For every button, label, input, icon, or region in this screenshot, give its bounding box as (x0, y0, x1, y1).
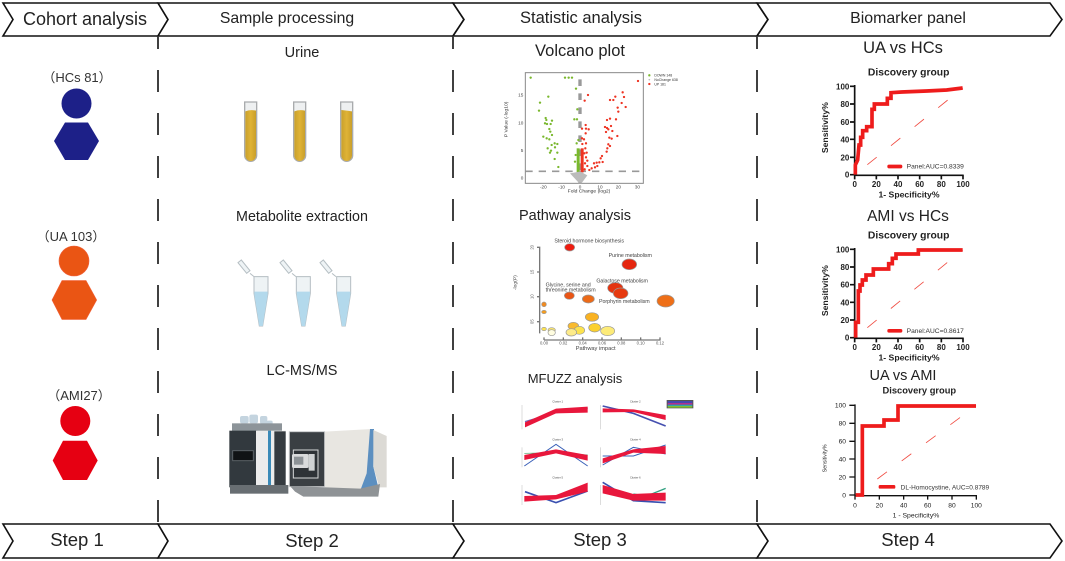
cohort: UA 103: （UA 103） (37, 229, 105, 244)
mfuzz: cluster titles: Cluster 4 (630, 438, 641, 442)
icon: microcentrifuge tubes (238, 260, 351, 326)
chart: ROC UA vs HCs: 20 (872, 180, 881, 189)
chart: ROC AMI vs HCs: 0 (845, 334, 850, 343)
heading: UA vs HCs: UA vs HCs (863, 39, 943, 57)
mfuzz: cluster titles: Cluster 1 (552, 400, 563, 404)
step header: Statistic analysis: Statistic analysis (520, 9, 642, 27)
volcano: legend: NoChange 638 (654, 78, 678, 82)
icon: urine tubes (245, 102, 353, 161)
chart: ROC UA vs HCs: Discovery group (868, 67, 949, 78)
volcano: x axis labels (540, 185, 640, 190)
heading: LC-MS/MS: LC-MS/MS (267, 363, 337, 379)
volcano: not significant points (570, 172, 587, 183)
chart: ROC AMI vs HCs: Panel:AUC=0.8617 (907, 328, 964, 335)
mfuzz: cluster titles: Cluster 3 (552, 438, 563, 442)
chart: ROC AMI vs HCs: 60 (915, 343, 925, 352)
step header: Statistic analysis (453, 3, 768, 36)
volcano: x axis labels: 30 (635, 185, 640, 190)
chart: ROC AMI vs HCs: 100 (956, 343, 970, 352)
chart: ROC UA vs HCs: 100 (836, 82, 850, 91)
mfuzz: legend (667, 400, 693, 408)
chart: ROC UA vs HCs: 60 (915, 180, 925, 189)
step footer: Step 2: Step 2 (285, 530, 339, 551)
step footer: Step 1: Step 1 (50, 529, 104, 550)
chart: ROC UA vs AMI: 80 (839, 421, 846, 428)
chart: ROC AMI vs HCs: 80 (937, 343, 946, 352)
chart: ROC UA vs HCs: Panel:AUC=0.8339 (907, 164, 964, 171)
chart: ROC UA vs AMI (823, 386, 990, 520)
chart: ROC AMI vs HCs: 60 (840, 281, 850, 290)
cohort: UA 103 (37, 229, 105, 320)
footer chevrons (3, 524, 1062, 558)
pathway: bubbles (542, 244, 674, 336)
chart: ROC AMI vs HCs: 1- Specificity% (878, 352, 940, 362)
step header: Cohort analysis: Cohort analysis (23, 9, 147, 29)
chart: ROC UA vs HCs: 80 (937, 180, 946, 189)
volcano: axis titles: P Value (-log10) (503, 101, 509, 137)
step footer: Step 2 (158, 524, 464, 558)
cohort: AMI27: （AMI27） (47, 388, 111, 403)
chart: volcano plot (503, 73, 678, 194)
chart: ROC UA vs HCs: 100 (956, 180, 970, 189)
volcano: legend: UP 181 (654, 82, 666, 86)
pathway: axis ticks: 0.08 (617, 340, 626, 345)
chart: ROC AMI vs HCs (820, 230, 970, 362)
volcano: y axis labels: 10 (518, 120, 524, 125)
step footer: Step 3: Step 3 (573, 529, 627, 550)
heading: Pathway analysis: Pathway analysis (519, 208, 631, 224)
chart: ROC AMI vs HCs: 20 (872, 343, 881, 352)
mfuzz: cluster 4 (603, 445, 666, 465)
mfuzz: cluster 1 (525, 407, 588, 427)
cohort: AMI27 (47, 388, 111, 480)
volcano: legend: DOWN 148 (654, 74, 672, 78)
pathway: axis ticks: 15 (529, 269, 534, 274)
pathway: axis ticks: 0.02 (559, 340, 568, 345)
mfuzz: cluster 3 (524, 444, 588, 466)
volcano: axis titles (503, 101, 611, 194)
heading: Metabolite extraction: Metabolite extraction (236, 209, 368, 225)
header chevrons (3, 3, 1062, 36)
mfuzz: cluster titles (552, 400, 641, 479)
step footer: Step 3 (453, 524, 768, 558)
mfuzz: cluster 6 (603, 482, 666, 503)
pathway: axis ticks: 0.06 (598, 340, 607, 345)
pathway: labels: Glycine, serine and (546, 283, 591, 289)
chart: ROC UA vs HCs: 0 (845, 171, 850, 180)
chart: ROC UA vs HCs: 40 (840, 135, 850, 144)
chart: pathway bubble plot (513, 239, 674, 352)
chart: ROC UA vs AMI: 40 (839, 456, 846, 463)
heading: Volcano plot: Volcano plot (535, 42, 625, 60)
chart: ROC UA vs AMI: 80 (948, 502, 956, 509)
pathway: labels (513, 239, 653, 352)
chart: ROC UA vs AMI: 100 (971, 502, 982, 509)
volcano: x axis labels: 20 (616, 185, 621, 190)
heading: MFUZZ analysis: MFUZZ analysis (528, 371, 623, 386)
chart: ROC AMI vs HCs: 40 (894, 343, 903, 352)
step header: Biomarker panel (757, 3, 1062, 36)
pathway: labels: Pathway impact (576, 346, 616, 352)
pathway: labels: Galactose metabolism (596, 278, 649, 284)
mfuzz: cluster titles: Cluster 6 (630, 475, 641, 479)
volcano: y axis labels (518, 92, 524, 181)
step header: Cohort analysis (3, 3, 168, 36)
step footer: Step 4 (757, 524, 1062, 558)
pathway: labels: threonine metabolism (546, 287, 596, 293)
heading: Urine: Urine (285, 45, 319, 61)
chart: ROC UA vs AMI: 20 (839, 474, 846, 481)
volcano: y axis labels: 5 (521, 148, 524, 153)
pathway: axis ticks: 10 (529, 294, 534, 299)
step footer: Step 1 (3, 524, 168, 558)
pathway: axis ticks: 20 (529, 244, 534, 250)
volcano: legend (648, 74, 678, 86)
chart: ROC AMI vs HCs: 100 (836, 245, 850, 254)
volcano: x axis labels: -20 (540, 185, 547, 190)
heading: AMI vs HCs: AMI vs HCs (867, 208, 949, 225)
chart: ROC UA vs HCs: Sensitivity% (820, 102, 830, 153)
pathway: axis ticks: 05 (529, 319, 534, 324)
pathway: labels: Steroid hormone biosynthesis (554, 239, 624, 245)
chart: ROC UA vs AMI: DL-Homocystine, AUC=0.8789 (901, 484, 990, 491)
chart: ROC UA vs HCs: 0 (852, 180, 857, 189)
chart: ROC UA vs AMI: Sensitivity% (823, 444, 829, 472)
chart: ROC AMI vs HCs: 0 (852, 343, 857, 352)
chart: ROC UA vs HCs: 60 (840, 118, 850, 127)
chart: ROC UA vs AMI: 0 (853, 502, 857, 509)
volcano: down points (529, 76, 579, 168)
chart: ROC UA vs AMI: 20 (876, 502, 883, 509)
chart: ROC UA vs HCs: 1- Specificity% (878, 189, 940, 199)
chart: ROC UA vs AMI: 0 (842, 492, 846, 499)
step footer: Step 4: Step 4 (881, 529, 935, 550)
chart: ROC AMI vs HCs: Sensitivity% (820, 265, 830, 316)
pathway: labels: -log(P) (513, 275, 519, 290)
pathway: axis ticks: 0.10 (637, 340, 645, 345)
pathway: labels: Purine metabolism (609, 253, 653, 259)
step header: Biomarker panel: Biomarker panel (850, 10, 966, 27)
heading: UA vs AMI: UA vs AMI (870, 368, 936, 384)
volcano: x axis labels: 0 (579, 185, 582, 190)
chart: ROC AMI vs HCs: 40 (840, 298, 850, 307)
chart: ROC UA vs AMI: 60 (839, 439, 846, 446)
cohort: HCs 81 (42, 70, 112, 160)
volcano: axis titles: Fold Change (log2) (568, 188, 611, 194)
pathway: axis ticks: 0.12 (656, 340, 665, 345)
chart: ROC UA vs HCs: 40 (894, 180, 903, 189)
pathway: labels: Porphyrin metabolism (599, 299, 650, 305)
chart: ROC AMI vs HCs: 20 (840, 316, 850, 325)
cohort: HCs 81: （HCs 81） (42, 70, 112, 85)
mfuzz: cluster 5 (524, 483, 588, 503)
mfuzz: cluster titles: Cluster 2 (630, 400, 641, 404)
pathway: axis ticks (529, 244, 665, 345)
volcano: up points (581, 80, 639, 171)
chart: ROC UA vs HCs (820, 67, 970, 199)
volcano: x axis labels: 10 (597, 185, 603, 190)
step header: Sample processing: Sample processing (220, 10, 354, 27)
pathway: axis ticks: 0.04 (579, 340, 587, 345)
icon: LC-MS instrument (229, 415, 387, 497)
chart: ROC UA vs AMI: 60 (924, 502, 932, 509)
volcano: y axis labels: 0 (521, 176, 524, 181)
chart: ROC UA vs AMI: 40 (900, 502, 908, 509)
chart: ROC UA vs AMI: 100 (835, 403, 846, 410)
mfuzz: cluster 2 (603, 406, 666, 426)
volcano: y axis labels: 15 (518, 92, 524, 97)
chart: ROC AMI vs HCs: 80 (840, 263, 850, 272)
mfuzz: cluster titles: Cluster 5 (552, 475, 563, 479)
chart: ROC AMI vs HCs: Discovery group (868, 230, 949, 241)
volcano: x axis labels: -10 (558, 185, 565, 190)
chart: ROC UA vs HCs: 80 (840, 100, 850, 109)
chart: ROC UA vs HCs: 20 (840, 153, 850, 162)
chart: ROC UA vs AMI: Discovery group (883, 386, 956, 396)
chart: MFUZZ clusters (522, 400, 693, 505)
chart: ROC UA vs AMI: 1 - Specificity% (893, 513, 939, 520)
pathway: axis ticks: 0.00 (540, 340, 549, 345)
step header: Sample processing (158, 3, 464, 36)
